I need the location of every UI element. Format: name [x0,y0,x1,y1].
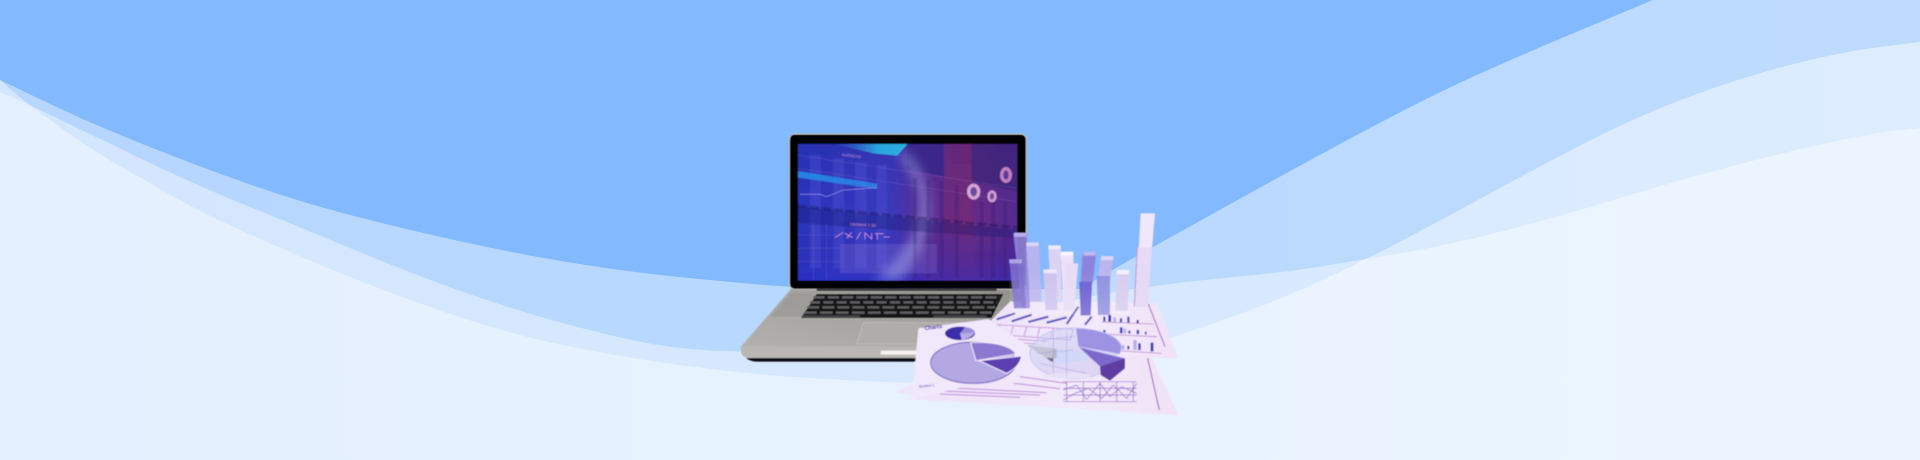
bar 1 [1013,233,1030,308]
screen: line chart [800,188,876,197]
glass pie: slice side [1100,358,1125,381]
laptop left palm highlight [770,293,815,317]
screen: glyph row [835,232,890,240]
bar 7 [1063,263,1078,311]
bar 3 [1026,242,1042,302]
charts sheet: section label: Section 1 [919,383,934,389]
screen: magenta column [944,144,972,238]
charts sheet: big pie [931,342,1022,383]
screen: label audscad: AUDSCAD [842,152,862,159]
bar 10 [1115,270,1129,311]
bar 8 [1079,252,1096,315]
screen: right stripes [915,178,1005,278]
glass pie: top slice [1076,328,1122,354]
bar 4 [1048,245,1062,300]
bar 2 [1009,259,1026,308]
back sheet: small bars [1103,315,1153,351]
screen: curved glow [873,152,930,281]
screen: left columns [810,155,887,268]
paper: charts sheet [912,319,1057,399]
laptop screen [798,144,1017,281]
laptop base deck [741,288,1057,358]
front sheet: line chart [1063,382,1137,402]
screen: donut 3 [1002,169,1010,181]
bar 9 [1097,256,1113,315]
laptop front edge [741,346,1053,359]
glass pie [1030,328,1125,381]
bar 5 [1043,269,1057,310]
back sheet: bar reflections [997,307,1092,325]
bar 6 [1061,252,1074,305]
laptop lid [789,134,1026,289]
bar 11 [1134,213,1155,307]
glass pie: inner lines [1037,332,1087,377]
screen: data row [798,206,1017,228]
wave: first translucent overlay [0,92,1920,460]
back sheet: row rules [1102,322,1162,353]
screen: donut 2 [989,192,995,201]
charts sheet: small pie [945,327,975,340]
back sheet: right rule [1148,304,1165,347]
bars: lower fade [1009,270,1129,315]
hinge shadow [817,288,997,291]
keyboard [801,294,1003,318]
front latch [881,351,924,355]
charts sheet: heading: Charts [924,324,943,332]
screen: cyan band [798,171,877,189]
screen: lower panel [840,244,937,273]
screen: left grid lines [798,155,1017,281]
screen: dark lower band [798,207,1017,238]
glass pie: lifted slice [1078,347,1125,368]
front sheet: right rule [1148,358,1159,410]
paper shadow corner [897,383,917,397]
trackpad [857,323,980,344]
back sheet: table [983,324,1073,340]
screen: donut 1 [969,185,979,198]
3D bar chart [1009,213,1155,315]
screen: cyan highlight [833,144,907,156]
screen: label updated: Updated 1:30 [850,221,877,228]
front sheet: text lines [933,377,1067,397]
paper: back sheet [973,302,1178,359]
screen: dark purple top block [907,144,944,177]
illustration: laptop with charts [741,134,1178,415]
laptop shadow line [746,358,1053,362]
laptop [741,134,1057,362]
screen: dark top right [972,144,1017,192]
paper: front sheet [912,353,1178,415]
